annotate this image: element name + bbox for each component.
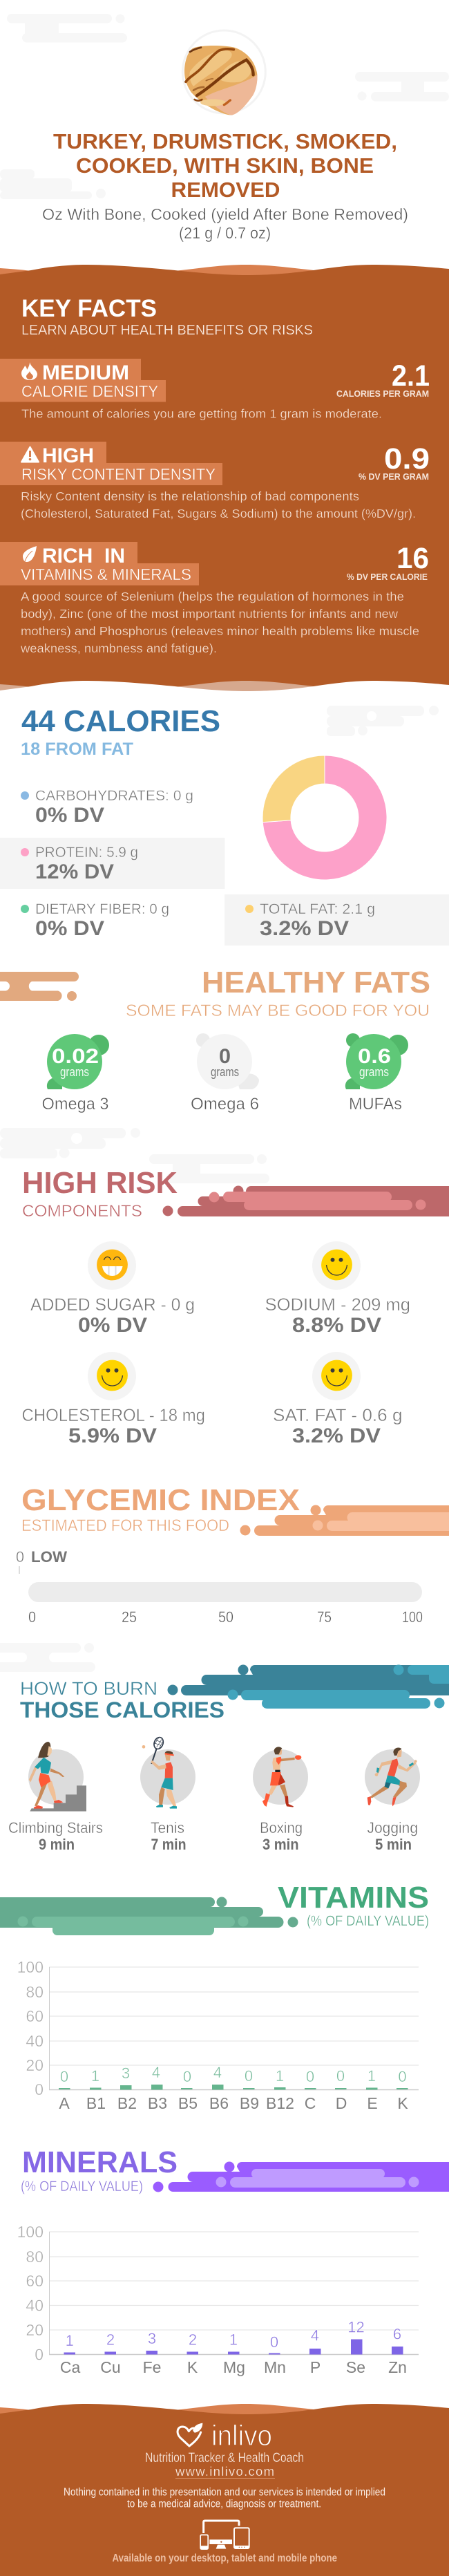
bar chart: minerals: 80 [26,2248,44,2266]
bar chart: vitamins: 4 [152,2064,160,2081]
bar chart: minerals: K [187,2358,198,2376]
activity: jogging [365,1748,420,1853]
macro: protein: 12% DV [35,861,114,883]
activity: boxing: Boxing [260,1819,303,1836]
item: added sugar [30,1241,195,1337]
disclaimer: to be a medical advice, diagnosis or treatment. [127,2499,321,2510]
bar chart: vitamins: 3 [122,2065,130,2082]
icon: flame [21,362,37,380]
panel: how to burn those calories [8,1664,449,1853]
heading: glycemic index: GLYCEMIC INDEX [21,1484,300,1517]
bar chart: vitamins [17,1958,419,2112]
decoration: high risk streak [163,1186,449,1216]
decoration: vitamins streak [0,1897,298,1935]
bar chart: minerals: 0 [270,2333,278,2351]
item: cholesterol [22,1352,205,1447]
icon: woman on stairs [29,1742,86,1812]
activity: climbing stairs: Climbing Stairs [8,1819,103,1836]
background clouds: header [0,14,449,199]
bar chart: vitamins: 0 [306,2068,314,2085]
serving size subtitle: (21 g / 0.7 oz) [179,224,271,242]
bar chart: minerals: Zn [388,2358,407,2376]
activity: jogging: Jogging [367,1819,418,1836]
panel: calories [0,705,449,946]
bar chart: minerals: Ca [60,2358,81,2376]
icon: devices [200,2521,249,2549]
icon: smiling face [312,1241,361,1290]
glycemic gauge: 100 [402,1608,423,1626]
glycemic gauge: 0 [28,1608,36,1626]
glycemic gauge: 75 [317,1608,332,1626]
bar chart: minerals: Se [346,2358,365,2376]
serving size subtitle [42,205,408,242]
bar chart: minerals: Fe [143,2358,161,2376]
decoration: glycemic streak [240,1505,449,1536]
bar chart: minerals: 20 [26,2321,44,2339]
bar chart: minerals: 1 [66,2332,74,2349]
availability note: Available on your desktop, tablet and mobile phone [112,2553,337,2564]
bar chart: minerals: Mn [264,2358,286,2376]
bar chart: vitamins: B2 [117,2094,137,2112]
fact: rich in vitamins and minerals: weakness, numbness and fatigue). [20,641,217,655]
bar chart: vitamins: 0 [183,2068,191,2085]
logo wordmark: inlivo [211,2419,272,2452]
fact: rich in vitamins and minerals: RICH IN [42,545,125,567]
bar chart: minerals: 100 [17,2223,44,2241]
bar chart: minerals: Cu [100,2358,121,2376]
heading: those calories: THOSE CALORIES [20,1698,224,1722]
macro: dietary fiber: 0% DV [35,917,104,940]
metric: mufas: 0.6 [358,1045,391,1068]
bar chart: vitamins: 0 [398,2068,407,2085]
fact: risky content density: (Cholesterol, Saturated Fat, Sugars & Sodium) to the amount (%DV/gr). [21,507,416,520]
fact: rich in vitamins and minerals: 16 [397,542,429,575]
subheading: key facts: LEARN ABOUT HEALTH BENEFITS OR RISKS [21,322,313,338]
metric: omega 6 [191,1033,259,1113]
glycemic gauge: 50 [218,1608,233,1626]
title: COOKED, WITH SKIN, BONE [76,153,374,178]
fact: calorie density [0,359,430,420]
fact: rich in vitamins and minerals: A good source of Selenium (helps the regulation of hormones in the [21,590,404,603]
panel: glycemic index [16,1484,449,1626]
metric: omega 6: Omega 6 [191,1095,259,1113]
bar chart: minerals: 60 [26,2272,44,2290]
macro: carbohydrates [21,787,193,827]
logo: inlivo heart and leaf [178,2423,202,2446]
title: REMOVED [171,178,280,202]
fact: rich in vitamins and minerals: body), Zinc (one of the most important nutrients for infants and new [21,607,398,621]
activity: tennis [140,1736,195,1853]
metric: omega 3 [41,1034,109,1113]
heading: calories: 44 CALORIES [21,705,220,738]
heading: key facts: KEY FACTS [21,295,157,322]
bar chart: minerals: 12 [347,2319,365,2336]
item: saturated fat [273,1352,402,1447]
fact: rich in vitamins and minerals: VITAMINS & MINERALS [21,565,191,583]
bar chart: minerals: 3 [148,2330,156,2347]
glycemic gauge: 0 [16,1548,24,1566]
bar chart: vitamins: 60 [26,2007,44,2025]
macro: protein [0,838,225,889]
bar chart: vitamins: 1 [91,2067,99,2085]
bar chart: vitamins: D [336,2094,347,2112]
food photo: grilled turkey [182,30,265,115]
activity: tennis: Tenis [151,1819,184,1836]
bar chart: minerals: 6 [393,2325,401,2342]
glycemic gauge: 25 [122,1608,137,1626]
heading: healthy fats: HEALTHY FATS [202,966,430,999]
item: cholesterol: CHOLESTEROL - 18 mg [22,1406,205,1425]
bar chart: minerals: 0 [35,2346,44,2364]
subheading: components: COMPONENTS [22,1202,142,1221]
bar chart: minerals: 2 [189,2331,197,2349]
fact: risky content density [0,442,430,520]
heading: vitamins: VITAMINS [278,1881,429,1915]
macro: protein: PROTEIN: 5.9 g [35,844,138,861]
metric: omega 6: 0 [219,1045,231,1068]
item: saturated fat: SAT. FAT - 0.6 g [273,1406,402,1425]
bar chart: vitamins: 0 [245,2067,253,2085]
decoration: burn streak [167,1664,449,1709]
macro: dietary fiber [21,901,169,940]
bar chart: vitamins: 1 [276,2067,284,2085]
activity: boxing [253,1747,308,1853]
title: TURKEY, DRUMSTICK, SMOKED, [53,129,397,153]
item: sodium: SODIUM - 209 mg [265,1295,410,1315]
serving size subtitle: Oz With Bone, Cooked (yield After Bone Removed) [42,205,408,223]
bar chart: vitamins: 40 [26,2032,44,2050]
bar chart: vitamins: 20 [26,2056,44,2074]
icon: warning triangle [21,446,39,462]
item: saturated fat: 3.2% DV [292,1425,381,1447]
icon: runner [367,1748,417,1806]
activity: jogging: 5 min [375,1836,412,1853]
macro: total fat: TOTAL FAT: 2.1 g [260,901,375,917]
macro: dietary fiber: DIETARY FIBER: 0 g [35,901,169,917]
bar chart: vitamins: 80 [26,1983,44,2001]
item: cholesterol: 5.9% DV [68,1425,157,1447]
bar chart: vitamins: 0 [35,2080,44,2098]
subheading: minerals percent of daily value: (% OF DAILY VALUE) [21,2179,143,2194]
fact: calorie density: MEDIUM [42,361,129,384]
fact: calorie density: CALORIE DENSITY [21,382,158,400]
bar chart: vitamins: K [397,2094,408,2112]
bar chart: vitamins: B5 [178,2094,198,2112]
tagline: Nutrition Tracker & Health Coach [145,2451,304,2465]
activity: tennis: 7 min [151,1836,187,1853]
bar chart: minerals: P [310,2358,321,2376]
icon: boxer [262,1747,301,1807]
bar chart: vitamins: B12 [266,2094,294,2112]
activity: climbing stairs: 9 min [39,1836,75,1853]
metric: mufas [345,1033,408,1113]
bar chart: vitamins: A [59,2094,70,2112]
subheading: glycemic index: ESTIMATED FOR THIS FOOD [21,1516,229,1535]
subheading: calories from fat: 18 FROM FAT [21,740,133,759]
disclaimer [64,2487,385,2510]
metric: omega 6: grams [211,1065,239,1079]
donut chart: macronutrients [262,755,387,880]
fact: risky content density: RISKY CONTENT DENSITY [21,465,216,483]
glycemic gauge [16,1548,423,1626]
panel: minerals [17,2146,449,2376]
fact: rich in vitamins and minerals: % DV PER CALORIE [347,572,428,582]
fact: calorie density: 2.1 [392,359,430,393]
panel: footer [0,2404,449,2576]
item: sodium: 8.8% DV [292,1314,381,1337]
bar chart: minerals: 1 [229,2331,238,2349]
bar chart: vitamins: B3 [148,2094,167,2112]
icon: smiling face [312,1352,361,1400]
bar chart: vitamins: E [367,2094,378,2112]
icon: leaf [23,546,37,562]
bar chart: vitamins: B9 [240,2094,259,2112]
bar chart: vitamins: 4 [213,2064,222,2081]
fact: risky content density: Risky Content density is the relationship of bad components [21,489,359,503]
item: added sugar: 0% DV [78,1314,147,1337]
heading: how to burn: HOW TO BURN [20,1678,157,1699]
bar chart: vitamins: 0 [60,2068,68,2085]
heading: high risk: HIGH RISK [22,1167,178,1200]
fact: calorie density: CALORIES PER GRAM [336,388,429,399]
fact: rich in vitamins and minerals: mothers) and Phosphorus (releaves minor health problems like muscle [21,624,419,638]
fact: risky content density: HIGH [42,444,94,467]
bar chart: vitamins: C [305,2094,316,2112]
icon: tennis player [142,1736,177,1809]
bar chart: minerals: 40 [26,2296,44,2314]
macro: total fat: 3.2% DV [260,917,349,940]
glycemic gauge: LOW [31,1548,68,1566]
bar chart: minerals [17,2223,419,2376]
panel: high risk components [22,1167,449,1447]
title [53,129,397,202]
activity: climbing stairs [8,1742,103,1853]
bar chart: vitamins: B1 [86,2094,106,2112]
macro: total fat [224,894,449,946]
panel: vitamins [0,1881,429,2112]
icon: grinning face [88,1241,136,1290]
decoration: healthy fats streak [0,972,79,1001]
subheading: healthy fats: SOME FATS MAY BE GOOD FOR YOU [126,1002,430,1020]
item: sodium [265,1241,410,1337]
bar chart: vitamins: B6 [209,2094,229,2112]
panel: healthy fats [0,966,430,1113]
subheading: vitamins percent of daily value: (% OF DAILY VALUE) [307,1913,429,1929]
metric: mufas: grams [359,1065,389,1079]
background clouds: burn section [0,1643,95,1672]
fact: calorie density: The amount of calories you are getting from 1 gram is moderate. [21,406,382,420]
macro: carbohydrates: CARBOHYDRATES: 0 g [35,787,193,804]
panel: key facts [0,265,449,699]
fact: risky content density: % DV PER GRAM [359,471,429,482]
background clouds: high risk [0,1128,269,1183]
heading: minerals: MINERALS [22,2146,178,2179]
macro: carbohydrates: 0% DV [35,804,104,827]
fact: rich in vitamins and minerals [0,542,429,655]
metric: omega 3: Omega 3 [41,1095,109,1113]
bar chart: vitamins: 0 [336,2067,345,2085]
bar chart: minerals: Mg [223,2358,245,2376]
bar chart: vitamins: 100 [17,1958,44,1976]
metric: mufas: MUFAs [349,1095,402,1113]
bar chart: minerals: 2 [106,2331,115,2349]
metric: omega 3: 0.02 [52,1045,99,1068]
activity: boxing: 3 min [262,1836,298,1853]
metric: omega 3: grams [60,1065,89,1079]
bar chart: vitamins: 1 [367,2067,376,2085]
website link: www.inlivo.com [175,2464,274,2479]
disclaimer: Nothing contained in this presentation and our services is intended or implied [64,2487,385,2499]
bar chart: minerals: 4 [311,2326,319,2344]
fact: risky content density: 0.9 [384,442,430,476]
decoration: minerals streak [153,2162,449,2192]
icon: smiling face [88,1352,136,1400]
item: added sugar: ADDED SUGAR - 0 g [30,1295,195,1315]
